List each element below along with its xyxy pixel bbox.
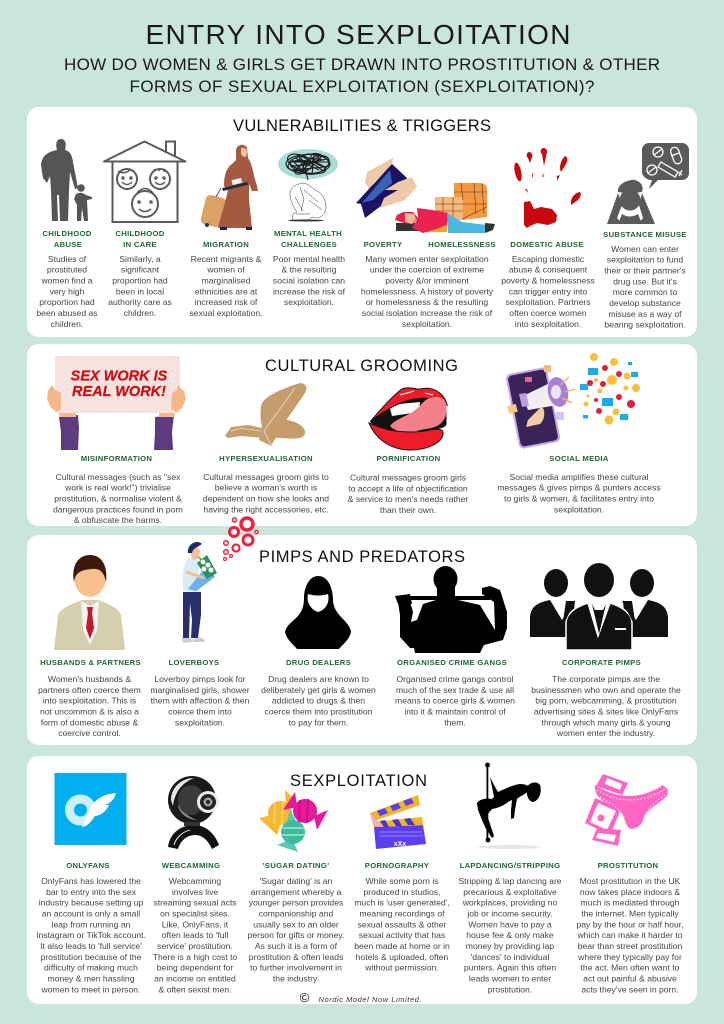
body text: coerce them into prostitution [265, 706, 373, 716]
body text: coercive control. [58, 728, 121, 738]
item: migration [189, 145, 263, 318]
body text: sexploitation. [554, 504, 604, 514]
icon: film clapperboard: xXx [394, 841, 406, 848]
body text: act out painful & abusive [583, 973, 677, 983]
body text: bar to entry into the sex [46, 887, 137, 897]
item: misinformation [47, 356, 186, 525]
body text: Many women enter sexploitation [365, 254, 489, 264]
body text: Poor mental health [273, 254, 345, 264]
body text: poverty & homelessness [501, 275, 595, 285]
heading: sexploitation: SEXPLOITATION [290, 772, 427, 790]
item: organised crime gangs [395, 566, 515, 727]
body text: dangerous practices found in porn [53, 504, 183, 514]
label: MISINFORMATION [81, 454, 152, 463]
body text: It also leads to 'full service' [40, 941, 142, 951]
body text: As such it is a form of [255, 941, 338, 951]
body text: prostitution. [488, 984, 532, 994]
copyright: © [300, 990, 310, 1005]
body text: been abused as [36, 308, 98, 318]
body text: prostitution, & normalise violent & [54, 493, 182, 503]
item: onlyfans [36, 773, 146, 994]
body text: misuse as a way of [608, 309, 682, 319]
body text: acts they've seen in porn. [581, 984, 679, 994]
body text: them. [444, 717, 466, 727]
body text: Loverboy pimps look for [154, 674, 246, 684]
body text: Cultural messages groom girls to [203, 472, 329, 482]
sign text: REAL WORK! [72, 384, 166, 400]
body text: punters. Again this often [464, 963, 556, 973]
icon: person sleeping by boxes [395, 183, 495, 233]
body text: & the resulting [282, 265, 337, 275]
item: domestic abuse [501, 148, 595, 329]
body text: & obfuscate the harms. [74, 515, 162, 525]
body text: Stripping & lap dancing are [458, 876, 562, 886]
label: 'SUGAR DATING' [263, 861, 329, 870]
body text: Social media amplifies these cultural [510, 472, 649, 482]
item: childhood abuse [36, 139, 98, 329]
item: hypersexualisation [203, 383, 329, 514]
icon: bloody hand print [513, 148, 581, 228]
body text: sexploitation. [175, 717, 225, 727]
body text: pay by the hour or half hour, [576, 919, 684, 929]
icon: pole dancer silhouette [477, 763, 541, 849]
icon: film clapperboard [370, 795, 426, 849]
body text: Drug dealers are known to [268, 674, 369, 684]
body text: women of [206, 265, 245, 275]
body text: dependent on how she looks and [203, 493, 329, 503]
body text: money by providing lap [466, 941, 554, 951]
label: HUSBANDS & PARTNERS [40, 658, 141, 667]
body text: sexploitation to fund [607, 255, 683, 265]
label: CHILDHOOD [115, 229, 165, 238]
body text: women to meet in person. [41, 984, 140, 994]
label: CHILDHOOD [42, 229, 92, 238]
body text: or homelessness & the resulting [366, 297, 488, 307]
body text: homelessness. A history of poverty [361, 286, 494, 296]
panel: vulnerabilities and triggers [27, 107, 697, 337]
item: childhood in care [104, 142, 186, 318]
body text: to pay for them. [289, 717, 348, 727]
icon: man with bat across shoulders [395, 566, 507, 653]
body text: addicted to drugs & then [272, 696, 365, 706]
icon: scribbled mind over crouching figure [278, 149, 338, 222]
label: IN CARE [123, 240, 157, 249]
icon: phone with megaphone and reactions [505, 353, 640, 449]
body text: having the right accessories, etc. [203, 504, 329, 514]
body text: job or income security. [466, 908, 553, 918]
body text: to accept a life of objectification [348, 483, 468, 493]
label: poverty: POVERTY [364, 240, 402, 249]
body text: Organised crime gangs control [396, 674, 514, 684]
label: PORNOGRAPHY [365, 861, 429, 870]
body text: 'Sugar dating' is an [260, 876, 332, 886]
body text: sexual exploitation. [189, 308, 263, 318]
icon: empty wallet in hands [356, 158, 417, 218]
body text: companionship and [259, 908, 333, 918]
panel: pimps and predators [27, 518, 697, 745]
label: LAPDANCING/STRIPPING [460, 861, 560, 870]
body text: on specialist sites. [160, 908, 230, 918]
body text: OnlyFans has lowered the [41, 876, 141, 886]
body text: drug use. But it's [613, 276, 677, 286]
body text: Women's husbands & [48, 674, 131, 684]
label: ORGANISED CRIME GANGS [397, 658, 507, 667]
body text: workplaces, providing no [462, 898, 558, 908]
item: substance misuse [603, 143, 689, 330]
body text: children. [51, 319, 83, 329]
icon: adult and child silhouette [41, 139, 92, 221]
body text: form of domestic abuse & [41, 717, 138, 727]
body text: involves live [172, 887, 218, 897]
subtitle: FORMS OF SEXUAL EXPLOITATION (SEXPLOITATION)? [130, 77, 594, 96]
body text: precarious & exploitative [463, 887, 557, 897]
body text: very high [50, 286, 85, 296]
body text: Webcamming [169, 876, 221, 886]
body text: prostitution because of the [41, 952, 142, 962]
copyright: Nordic Model Now Limited. [318, 995, 422, 1004]
body text: Cultural messages groom girls [350, 472, 466, 482]
label: PORNIFICATION [377, 454, 441, 463]
body text: than their own. [380, 505, 436, 515]
body text: been in local [116, 286, 164, 296]
label: DOMESTIC ABUSE [510, 240, 584, 249]
label: DRUG DEALERS [286, 658, 351, 667]
label: CORPORATE PIMPS [562, 658, 641, 667]
body text: an account is only a small [42, 908, 140, 918]
body text: person for gifts or money. [248, 930, 344, 940]
body text: often coerce women [509, 308, 587, 318]
label: ABUSE [54, 240, 82, 249]
icon: wrapped sweets [259, 790, 328, 852]
body text: to girls & women, & facilitates entry into [504, 493, 654, 503]
panel: sexploitation [27, 756, 697, 1005]
body text: the industry. [273, 973, 319, 983]
item: prostitution [576, 774, 684, 994]
body text: them with affection & then [151, 696, 250, 706]
body text: marginalised [202, 275, 251, 285]
body text: house fee & only make [466, 930, 554, 940]
icon: faceless man in suit [54, 555, 125, 650]
body text: into it & maintain control of [404, 706, 506, 716]
heading: vulnerabilities: VULNERABILITIES & TRIGGERS [233, 117, 491, 135]
body text: without permission. [364, 963, 439, 973]
body text: now takes place indoors & [580, 887, 680, 897]
icon: sign held by two hands [47, 356, 186, 450]
body text: industry because setting up [39, 898, 144, 908]
icon: woman with suitcase [200, 145, 258, 230]
body text: their or their partner's [604, 265, 686, 275]
body text: prostitution & often leads [249, 952, 343, 962]
body text: into sexploitation. [515, 319, 581, 329]
body text: Instagram or TikTok account. [36, 930, 146, 940]
item: lapdancing and stripping [458, 763, 562, 994]
body text: hotels & uploaded, often [356, 952, 449, 962]
body text: Women can enter [611, 244, 679, 254]
body text: produced in studios, [364, 887, 440, 897]
body text: the internet. Men typically [581, 908, 679, 918]
body text: ethnicities are at [195, 286, 258, 296]
body text: which can make it harder to [576, 930, 683, 940]
body text: arrangement whereby a [251, 887, 342, 897]
heading: pimps and predators: PIMPS AND PREDATORS [259, 548, 465, 566]
body text: advertising sites & sites like OnlyFans [534, 706, 678, 716]
body text: women find a [40, 275, 93, 285]
icon: person with drugs speech bubble [607, 143, 689, 224]
body text: where they typically pay for [577, 952, 682, 962]
body text: & service to men's needs rather [348, 494, 468, 504]
body text: social isolation can [273, 275, 345, 285]
body text: Women have to pay a [468, 919, 552, 929]
label: homelessness: HOMELESSNESS [428, 240, 496, 249]
body text: partners often coerce them [38, 685, 141, 695]
body text: often leads to 'full [162, 930, 228, 940]
body text: big porn, webcamming, & prostitution [535, 696, 677, 706]
body text: through which many girls & young [542, 717, 671, 727]
label: ONLYFANS [66, 861, 110, 870]
body text: leap from running an [52, 919, 131, 929]
body text: poverty &/or imminent [385, 275, 469, 285]
icon: man with bouquet and hearts [182, 518, 258, 643]
body text: marginalised girls, shower [150, 685, 250, 695]
body text: Cultural messages (such as "sex [56, 472, 181, 482]
body text: & often sexist men. [158, 984, 232, 994]
body text: streaming sexual acts [153, 898, 237, 908]
body text: bear than street prostitution [578, 941, 683, 951]
item: sugar dating [248, 790, 344, 983]
item: mental health [273, 149, 346, 307]
body text: significant [121, 265, 160, 275]
body text: sexual assaults & other [358, 919, 447, 929]
title: ENTRY INTO SEXPLOITATION [146, 19, 570, 50]
body text: increased risk of [195, 297, 258, 307]
body text: children. [124, 308, 156, 318]
panel: cultural grooming [27, 344, 697, 526]
body text: coerce them into [168, 706, 232, 716]
body text: difficulty of making much [44, 963, 138, 973]
subtitle: HOW DO WOMEN & GIRLS GET DRAWN INTO PROSTITUTION & OTHER [64, 55, 660, 74]
body text: Most prostitution in the UK [580, 876, 681, 886]
label: CHALLENGES [281, 240, 337, 249]
body text: 'dances' to individual [471, 952, 549, 962]
body text: businessmen who own and operate the [531, 685, 681, 695]
body text: women enter the industry. [556, 728, 655, 738]
item: husbands and partners [38, 555, 141, 738]
heading: cultural grooming: CULTURAL GROOMING [265, 357, 458, 375]
body text: believe a woman's worth is [215, 483, 317, 493]
sign text: SEX WORK IS [71, 368, 168, 384]
icon: hooded figure [285, 576, 351, 649]
icon: house with children's faces [104, 142, 186, 222]
body text: to further involvement in [250, 963, 342, 973]
item: drug dealers [261, 576, 376, 727]
icon: pink underwear and banknotes [585, 774, 668, 846]
label: SOCIAL MEDIA [549, 454, 609, 463]
body text: Escaping domestic [512, 254, 585, 264]
body text: much is mediated through [581, 898, 680, 908]
icon: lips and tongue [369, 388, 447, 450]
body text: been made at home or in [354, 941, 450, 951]
body text: There is a high cost to [153, 952, 237, 962]
body text: Like, OnlyFans, it [162, 919, 229, 929]
body text: Similarly, a [119, 254, 161, 264]
body text: develop substance [609, 298, 681, 308]
icon: onlyfans logo [54, 773, 126, 845]
item: pornography [354, 795, 450, 973]
body text: deliberately get girls & women [261, 685, 376, 695]
item: loverboys [150, 518, 258, 727]
item: social media [497, 353, 661, 514]
body text: abuse & consequent [509, 265, 588, 275]
item: poverty and homelessness [356, 158, 496, 329]
body text: younger person provides [249, 898, 343, 908]
body text: social isolation increase the risk of [362, 308, 493, 318]
body text: sexploitation. [402, 319, 452, 329]
body text: messages & gives pimps & punters access [497, 483, 661, 493]
body text: money & men hassling [48, 973, 135, 983]
body text: bearing sexploitation. [604, 320, 686, 330]
body text: proportion had [39, 297, 95, 307]
item: pornification [348, 388, 468, 515]
body text: more common to [613, 287, 677, 297]
body text: While some porn is [365, 876, 439, 886]
icon: crossed legs [225, 383, 306, 446]
body text: being dependent for [157, 963, 233, 973]
body text: authority care as [108, 297, 172, 307]
body text: leads women to enter [469, 973, 551, 983]
body text: increase the risk of [273, 286, 346, 296]
body text: can trigger entry into [509, 286, 587, 296]
label: HYPERSEXUALISATION [219, 454, 313, 463]
label: MENTAL HEALTH [274, 229, 342, 238]
body text: service' prostitution. [157, 941, 233, 951]
body text: meaning recordings of [359, 908, 445, 918]
body text: sexual activity that has [359, 930, 445, 940]
label: PROSTITUTION [598, 861, 659, 870]
body text: proportion had [112, 275, 168, 285]
item: webcamming [153, 776, 237, 994]
body text: much is 'user generated', [354, 898, 450, 908]
body text: Recent migrants & [191, 254, 262, 264]
body text: much of the sex trade & use all [396, 685, 514, 695]
copyright [300, 990, 422, 1005]
label: WEBCAMMING [162, 861, 220, 870]
subtitle [64, 55, 660, 96]
body text: prostituted [47, 265, 87, 275]
body text: an income on entitled [154, 973, 236, 983]
body text: usually sex to an older [253, 919, 339, 929]
body text: sexploitation. Partners [505, 297, 591, 307]
icon: three businessmen silhouettes [530, 563, 668, 650]
body text: means to coerce girls & women [395, 696, 515, 706]
body text: The corporate pimps are the [552, 674, 660, 684]
label: MIGRATION [203, 240, 249, 249]
label: SUBSTANCE MISUSE [603, 230, 687, 239]
item: corporate pimps [530, 563, 681, 738]
body text: work is real work!") trivialise [64, 483, 171, 493]
label: LOVERBOYS [169, 658, 219, 667]
body text: not uncommon & is also a [40, 706, 139, 716]
body text: Studies of [48, 254, 87, 264]
body text: the act. Men often want to [581, 963, 680, 973]
body text: sexploitation. [284, 297, 334, 307]
body text: under the coercion of extreme [370, 265, 484, 275]
icon: webcam [168, 776, 219, 849]
body text: into sexploitation. This is [43, 696, 136, 706]
